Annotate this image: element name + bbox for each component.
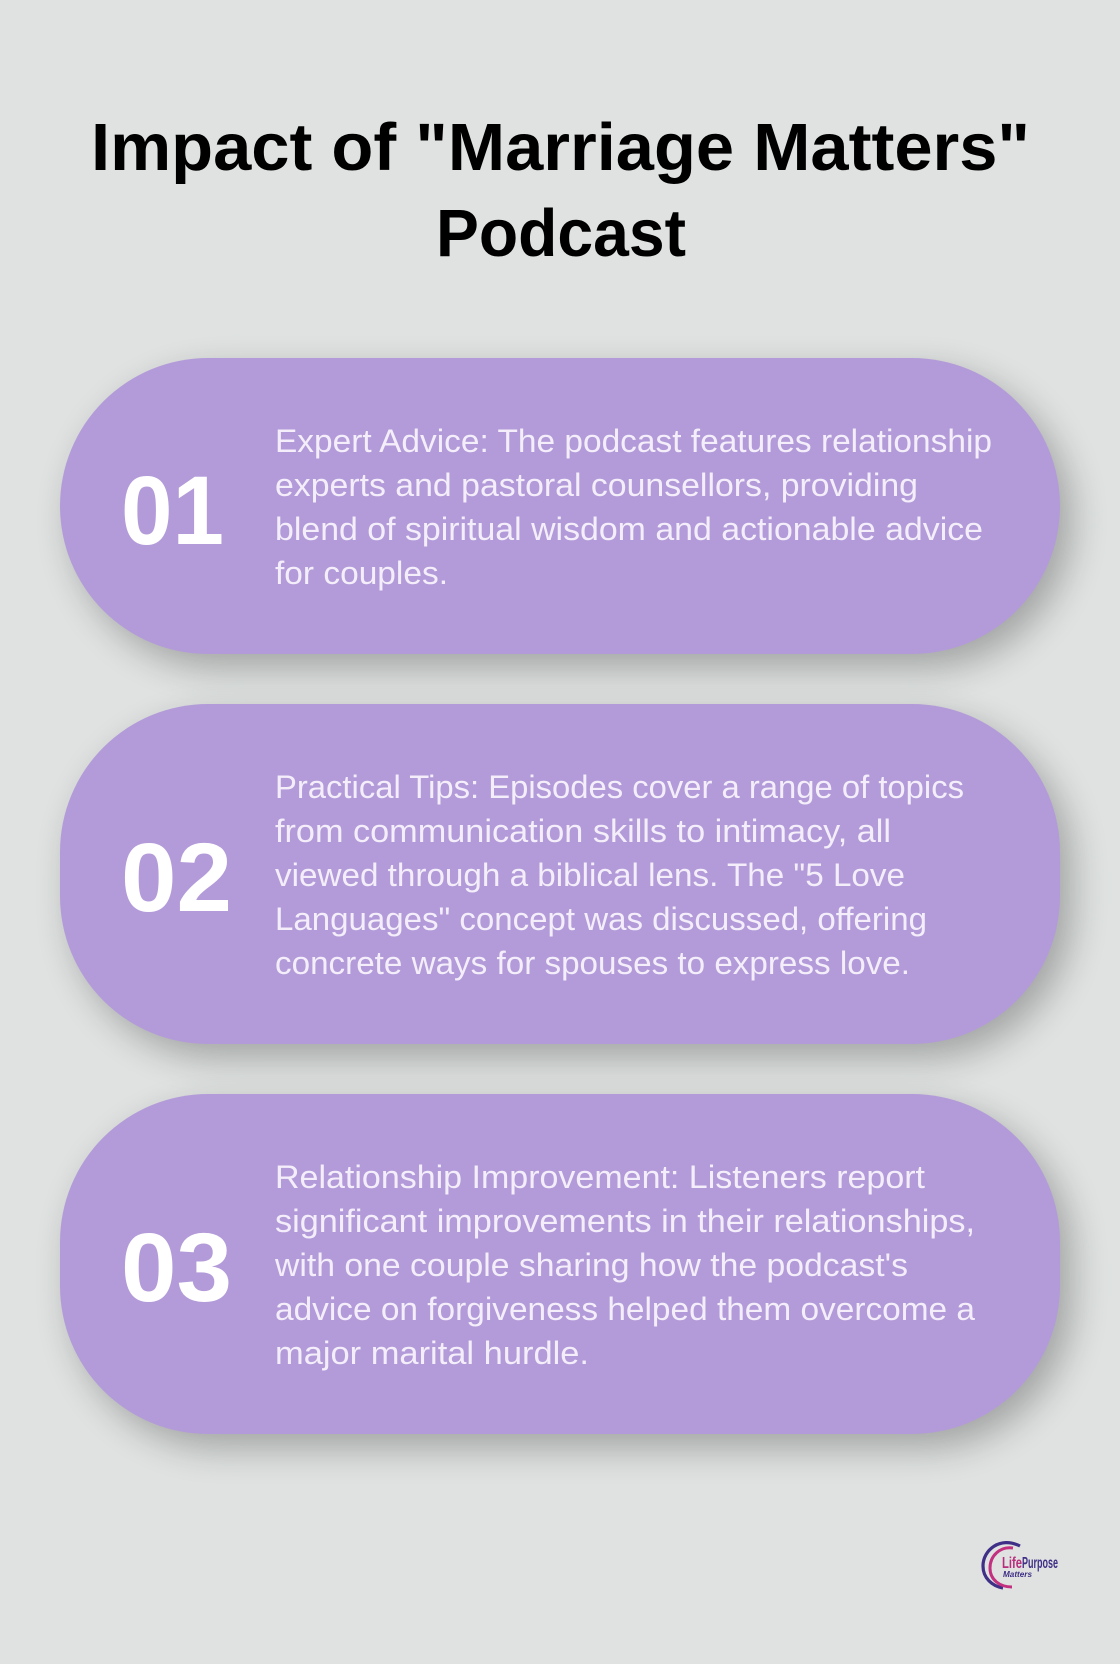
text: practical tips: Practical Tips: Episodes cover a range of topics [275,769,964,805]
logo: Life [1002,1555,1022,1572]
panel: expert advice [60,358,1072,668]
text: practical tips: concrete ways for spouses to express love. [275,945,910,981]
logo: Purpose [1022,1555,1058,1572]
title: Podcast [436,196,686,271]
panel: practical tips [60,704,1072,1058]
title [91,110,1030,271]
text: practical tips [275,769,964,981]
text: relationship improvement: with one couple sharing how the podcast's [274,1247,908,1283]
text: expert advice: experts and pastoral counsellors, providing [275,467,918,503]
text: expert advice: blend of spiritual wisdom and actionable advice [275,511,983,547]
text: expert advice [275,423,992,591]
text: relationship improvement: major marital hurdle. [275,1335,589,1371]
text: expert advice: Expert Advice: The podcast features relationship [275,423,992,459]
logo: Matters [1003,1569,1032,1579]
text: practical tips: Languages" concept was discussed, offering [275,901,927,937]
title: Impact of "Marriage Matters" [91,110,1030,185]
number 02: 02 [121,823,232,932]
text: relationship improvement: advice on forgiveness helped them overcome a [275,1291,976,1327]
number 01: 01 [121,456,224,565]
text: practical tips: viewed through a biblical lens. The "5 Love [275,857,905,893]
panel: relationship improvement [60,1094,1072,1448]
text: relationship improvement: significant improvements in their relationships, [275,1203,975,1239]
text: practical tips: from communication skills to intimacy, all [275,813,891,849]
text: expert advice: for couples. [275,555,448,591]
text: relationship improvement: Relationship Improvement: Listeners report [275,1159,925,1195]
logo [983,1543,1058,1588]
text: relationship improvement [274,1159,976,1371]
number 03: 03 [121,1213,232,1322]
